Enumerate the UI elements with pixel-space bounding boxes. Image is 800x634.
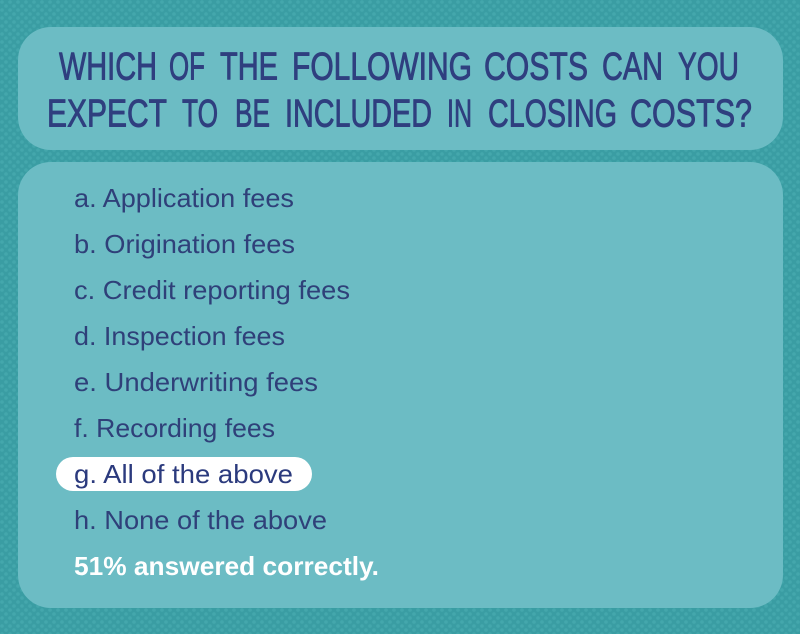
- heading: question title: INCLUDED: [285, 92, 432, 136]
- heading: question title: IN: [447, 92, 472, 136]
- option c: c. Credit reporting fees: [74, 275, 350, 305]
- option a: a. Application fees: [74, 183, 294, 213]
- heading: question title: BE: [235, 92, 270, 136]
- heading: question title: CLOSING: [488, 92, 617, 136]
- heading: question title: CAN: [602, 46, 663, 88]
- heading: question title: THE: [220, 46, 278, 88]
- heading: question title: [47, 46, 752, 136]
- heading: question title: COSTS?: [630, 92, 752, 136]
- heading: question title: EXPECT: [47, 92, 167, 136]
- option g: highlighted correct answer: g. All of the above: [74, 459, 293, 489]
- option f: f. Recording fees: [74, 413, 275, 443]
- heading: question title: OF: [169, 46, 205, 88]
- heading: question title: FOLLOWING: [292, 46, 472, 88]
- heading: question title: YOU: [678, 46, 739, 88]
- option b: b. Origination fees: [74, 229, 295, 259]
- heading: question title: WHICH: [59, 46, 157, 88]
- option d: d. Inspection fees: [74, 321, 285, 351]
- panel: question heading: [18, 27, 783, 150]
- heading: question title: TO: [182, 92, 218, 136]
- panel: answer options: [18, 162, 783, 608]
- heading: question title: COSTS: [484, 46, 588, 88]
- option h: h. None of the above: [74, 505, 327, 535]
- option e: e. Underwriting fees: [74, 367, 318, 397]
- result callout: 51% answered correctly.: [74, 551, 379, 581]
